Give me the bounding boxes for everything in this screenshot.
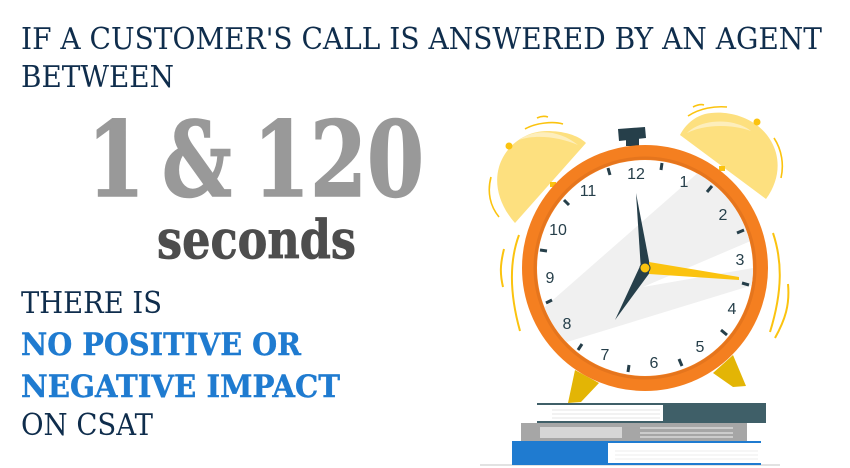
clock numbers: 12 [627,166,645,183]
unit: seconds: seconds [157,209,356,271]
conclusion text: NO POSITIVE OR [21,327,301,363]
top button [618,127,646,146]
clock numbers: 5 [696,339,705,356]
clock numbers: 10 [549,222,567,239]
vibration marks [501,233,788,338]
clock body [530,152,760,384]
clock numbers: 4 [728,301,737,318]
clock numbers: 7 [601,347,610,364]
title: BETWEEN [21,60,174,95]
clock numbers: 6 [650,355,659,372]
title [21,22,822,95]
left bell [489,116,586,223]
big number: 1 & 120: 120 [253,98,424,221]
clock hands [615,193,739,320]
conclusion text: THERE IS [21,286,162,321]
clock feet [568,355,746,403]
conclusion text: NEGATIVE IMPACT [21,369,340,405]
clock face shading [544,174,753,342]
clock ticks [540,163,749,372]
conclusion text [21,286,340,443]
clock numbers [546,166,745,372]
clock numbers: 3 [736,252,745,269]
big number: 1 & 120 [87,98,424,221]
big number: 1 & 120: & [162,98,232,221]
stack of books [512,403,766,465]
big number: 1 & 120: 1 [87,98,145,221]
conclusion text: ON CSAT [21,408,153,443]
ground line [480,464,780,466]
clock numbers: 1 [680,174,689,191]
icon: alarm clock on books [480,105,790,466]
clock numbers: 11 [580,183,596,200]
right bell [680,105,782,199]
clock numbers: 2 [719,207,728,224]
clock numbers: 9 [546,270,555,287]
clock numbers: 8 [563,316,572,333]
